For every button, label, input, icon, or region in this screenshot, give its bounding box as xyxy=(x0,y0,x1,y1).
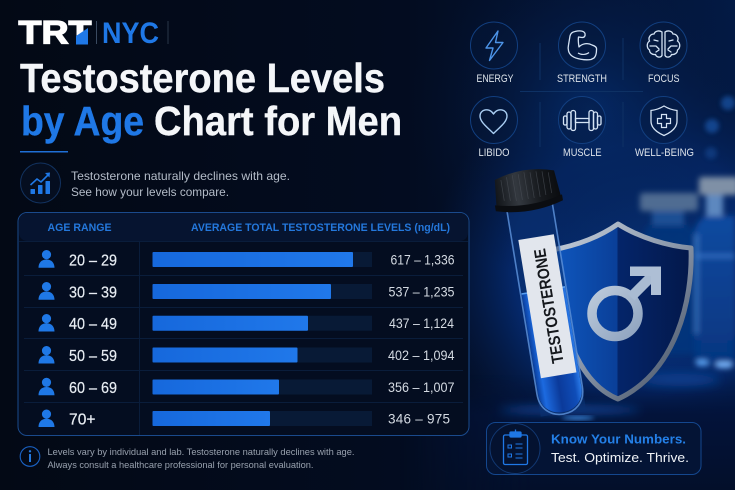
row: 50 – 59: 402 – 1,094 xyxy=(388,348,455,363)
logo: TRT NYC xyxy=(18,14,168,50)
benefit: focus: FOCUS xyxy=(648,73,680,85)
benefit: libido: LIBIDO xyxy=(478,147,510,159)
tube label xyxy=(518,234,576,378)
row: 70+: 346 – 975 xyxy=(388,412,450,426)
floor reflection xyxy=(500,374,720,413)
tube cap xyxy=(490,165,564,216)
row: 60 – 69: 356 – 1,007 xyxy=(388,380,454,395)
benefit: muscle xyxy=(558,96,606,159)
title xyxy=(20,55,402,144)
row: 30 – 39: 30 – 39 xyxy=(69,284,117,302)
logo: TRT NYC: NYC xyxy=(102,17,159,50)
blue liquid xyxy=(521,286,585,416)
callout: know your numbers xyxy=(486,422,701,474)
benefit: focus xyxy=(640,22,687,85)
row: 60 – 69 xyxy=(38,378,454,397)
table header: AGE RANGE xyxy=(48,222,112,234)
row: 20 – 29: 617 – 1,336 xyxy=(390,252,454,268)
intro text xyxy=(71,169,290,199)
benefit: energy xyxy=(470,22,518,85)
benefit dividers xyxy=(520,38,643,147)
row: 40 – 49 xyxy=(38,314,454,333)
benefit: energy: ENERGY xyxy=(476,73,514,85)
benefit: muscle: MUSCLE xyxy=(563,147,602,159)
table header xyxy=(48,222,450,234)
blurred bokeh lights xyxy=(705,96,735,159)
icon: clipboard xyxy=(504,430,528,464)
row: 20 – 29 xyxy=(38,250,454,270)
benefit: well-being: WELL-BEING xyxy=(635,147,694,159)
background xyxy=(404,0,735,490)
title: Chart for Men xyxy=(154,98,402,144)
footnote: Always consult a healthcare professional for personal evaluation. xyxy=(48,460,314,471)
row: 30 – 39: 537 – 1,235 xyxy=(388,284,454,300)
footnote xyxy=(48,447,354,471)
benefit: strength: STRENGTH xyxy=(557,73,607,85)
row: 40 – 49: 40 – 49 xyxy=(69,316,117,333)
icon: rising chart xyxy=(20,163,60,203)
row: 40 – 49: 437 – 1,124 xyxy=(389,316,454,331)
row: 30 – 39 xyxy=(38,282,454,302)
row: 20 – 29: 20 – 29 xyxy=(69,252,117,270)
logo: TRT NYC: TRT xyxy=(18,14,92,50)
icon: info xyxy=(20,447,40,466)
title: by Age xyxy=(21,98,144,144)
title: Testosterone Levels xyxy=(20,55,385,101)
callout: know your numbers: Test. Optimize. Thrive. xyxy=(551,450,689,465)
icon: male symbol xyxy=(592,266,661,336)
footnote: Levels vary by individual and lab. Testosterone naturally declines with age. xyxy=(48,447,354,458)
shield with male symbol xyxy=(552,224,691,399)
row: 70+: 70+ xyxy=(69,412,96,428)
row: 50 – 59 xyxy=(38,346,455,365)
benefit: strength xyxy=(557,22,607,85)
blurred vials xyxy=(640,177,735,368)
table header: AVERAGE TOTAL TESTOSTERONE LEVELS (ng/dL) xyxy=(191,222,450,234)
intro text: Testosterone naturally declines with age. xyxy=(71,169,290,183)
benefit: well-being xyxy=(635,96,694,159)
intro text: See how your levels compare. xyxy=(71,185,229,199)
table panel xyxy=(18,212,469,436)
tube label: TESTOSTERONE xyxy=(531,247,568,365)
test tube xyxy=(490,165,597,420)
benefit: libido xyxy=(470,96,518,159)
callout: know your numbers: Know Your Numbers. xyxy=(551,432,686,446)
row: 70+ xyxy=(38,410,450,428)
row: 50 – 59: 50 – 59 xyxy=(69,348,117,365)
row: 60 – 69: 60 – 69 xyxy=(69,380,117,397)
